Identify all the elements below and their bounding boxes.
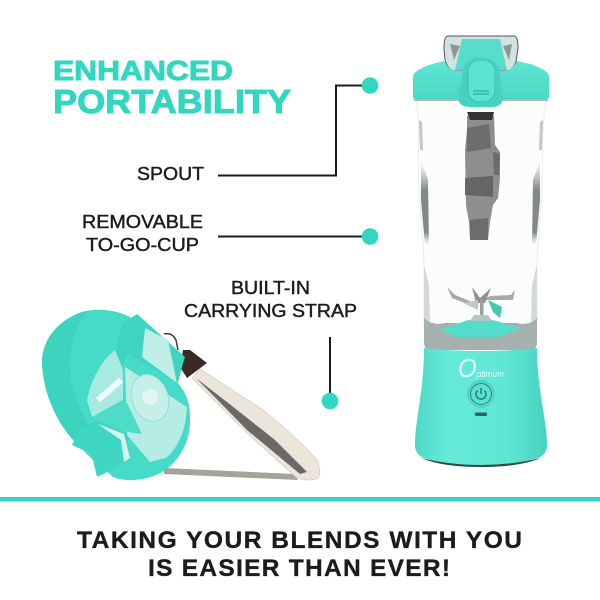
grey ring [424,318,537,350]
label: built-in carrying strap [184,278,357,321]
product: blender bottle [413,36,549,467]
motor base [415,348,547,466]
lid clasp [458,57,503,107]
brand logo: Optimum [458,353,504,383]
callout line: to-go-cup [218,228,378,245]
icon: power button [468,381,494,407]
closing statement [77,527,522,582]
label: removable to-go-cup [82,212,203,255]
label: removable to-go-cup: TO-GO-CUP [86,235,199,255]
lid seal [125,369,175,427]
label: removable to-go-cup: REMOVABLE [82,212,203,232]
label: built-in carrying strap: CARRYING STRAP [184,301,357,321]
strap [164,334,320,480]
callout line: carrying strap [322,337,338,409]
cup body [416,99,546,325]
label: spout: SPOUT [137,164,204,184]
heading: enhanced portability [53,55,291,120]
lid disk shadow edge [42,311,88,443]
strap inside cup [465,112,500,240]
heading: enhanced portability: ENHANCED [53,55,233,86]
closing statement: TAKING YOUR BLENDS WITH YOU [77,527,522,554]
callout line: spout [218,77,378,176]
lid spout dome [444,36,518,71]
clear window right [125,367,187,462]
cup shading [419,120,543,322]
heading: enhanced portability: PORTABILITY [53,83,291,120]
lid clasp arm [115,314,185,383]
spout interior [455,39,507,70]
closing statement: IS EASIER THAN EVER! [148,555,450,582]
clear window left [87,347,123,417]
divider bar [0,497,600,502]
teal cylinder [93,403,142,434]
label: built-in carrying strap: BUILT-IN [231,278,310,298]
product: detached lid with strap [42,310,320,480]
blade assembly [447,287,515,321]
charging indicator [475,412,487,416]
blade hub [440,320,520,337]
lid disk [42,310,190,480]
lid band [413,61,549,99]
lid clasp tab [72,420,130,477]
